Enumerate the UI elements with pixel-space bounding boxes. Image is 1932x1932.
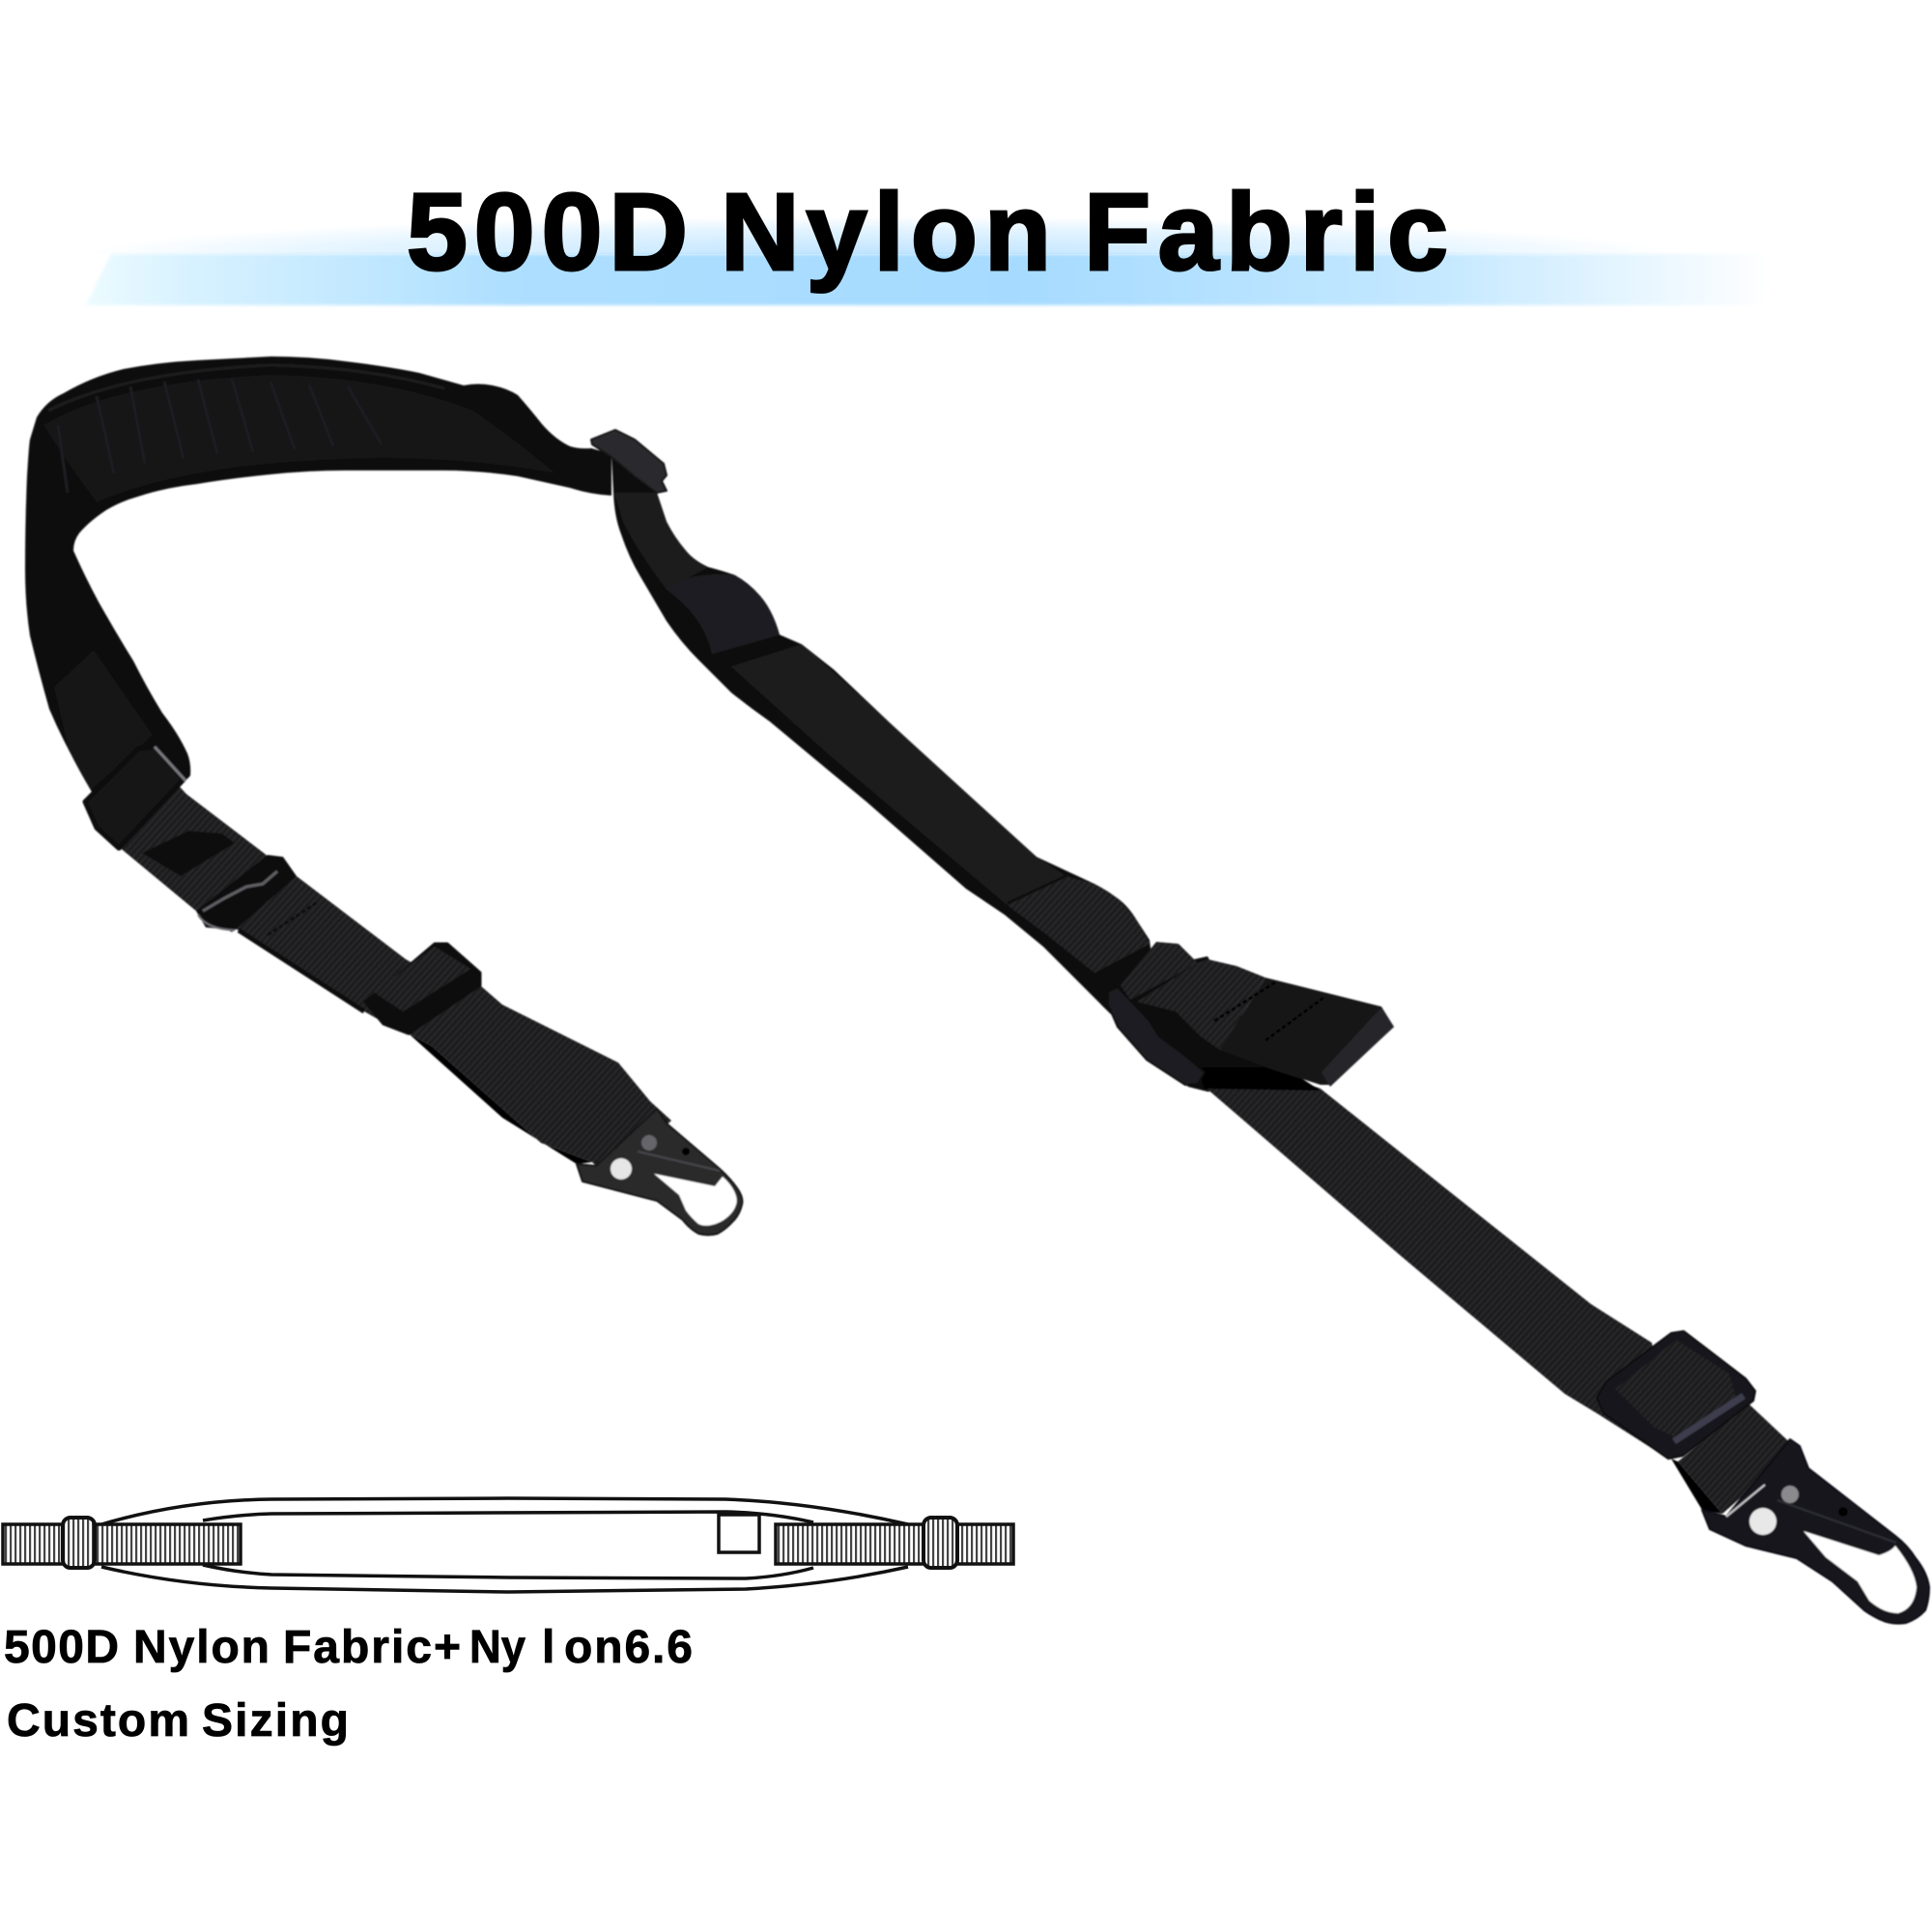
title: Fabric [1084, 171, 1448, 293]
caption: material: Ny [469, 1622, 526, 1673]
right slider [1597, 1331, 1755, 1459]
left shoulder buckle [85, 747, 185, 848]
caption: material: Nylon [133, 1622, 270, 1673]
title highlight band [86, 179, 1773, 305]
title: Nylon [721, 171, 1051, 293]
long right webbing [1101, 956, 1797, 1514]
left tri-glide ring [196, 855, 297, 930]
sling line diagram [3, 1498, 1013, 1592]
right mid buckle [1108, 987, 1205, 1085]
caption: sizing: Sizing [202, 1695, 349, 1747]
title: 500D [407, 171, 688, 293]
shoulder pad [25, 356, 611, 850]
left webbing strap [111, 781, 671, 1179]
left slider [365, 944, 480, 1034]
product photo: two-point sling [25, 356, 1929, 1624]
top slider buckle [591, 430, 667, 493]
caption: sizing: Custom [7, 1695, 189, 1747]
left hook [577, 1109, 742, 1235]
right tail strap [1121, 942, 1394, 1087]
caption: material: 500D [4, 1622, 119, 1673]
caption: material: on6.6 [564, 1622, 693, 1673]
right hook [1702, 1439, 1929, 1624]
center strap with loop [611, 454, 1159, 1014]
caption: material: Fabric+ [283, 1622, 461, 1673]
caption: material: l [542, 1622, 554, 1673]
